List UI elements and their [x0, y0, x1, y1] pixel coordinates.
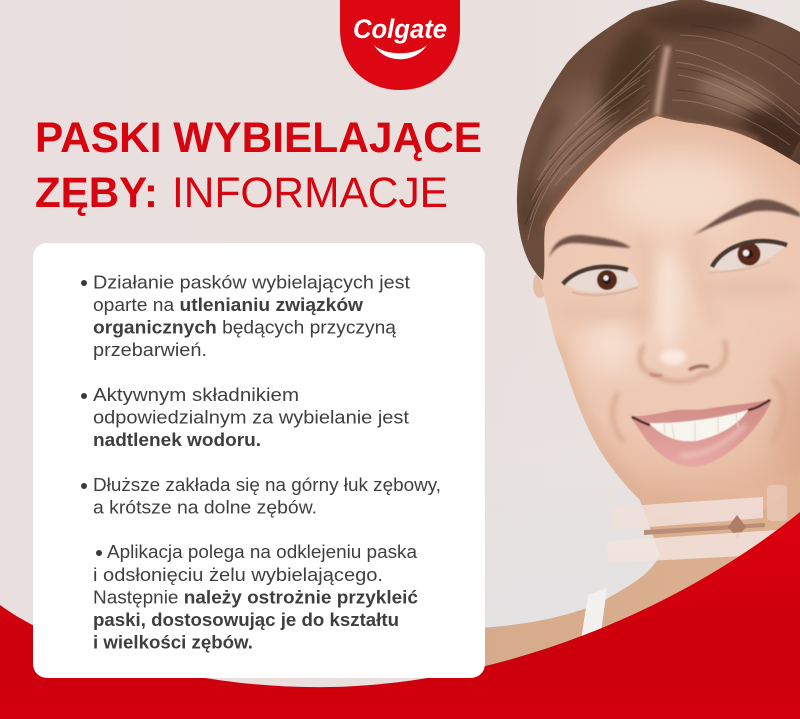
whitening strips [607, 485, 787, 563]
bullet 4: Następnie należy ostrożnie przykleić [93, 588, 418, 608]
title: INFORMACJE [172, 169, 448, 217]
bullet 1 [81, 272, 410, 360]
red wave [0, 512, 800, 719]
bullet 4: paski, dostosowując je do kształtu [93, 610, 399, 630]
photo: smiling woman with whitening strips [480, 0, 800, 700]
eyes [563, 241, 787, 295]
title: ZĘBY: [35, 169, 158, 217]
panel: information card [33, 243, 485, 678]
bullet 2: Aktywnym składnikiem [93, 385, 299, 405]
nose [640, 340, 726, 382]
title [35, 114, 482, 217]
bullet 1: przebarwień. [93, 340, 207, 360]
bullet 3 [81, 475, 441, 518]
face shading [555, 157, 800, 528]
bullet 4 [93, 542, 418, 652]
bullet 2: odpowiedzialnym za wybielanie jest [93, 408, 409, 428]
bullet 1: oparte na utlenianiu związków [93, 295, 364, 315]
mouth [630, 399, 772, 467]
bullet 3: a krótsze na dolne zębów. [93, 498, 317, 518]
bullet 3: Dłuższe zakłada się na górny łuk zębowy, [93, 475, 441, 495]
title: PASKI WYBIELAJĄCE [35, 114, 482, 162]
bullet 2: nadtlenek wodoru. [93, 430, 261, 450]
eyebrows [549, 199, 800, 258]
bullet 1: organicznych będących przyczyną [93, 318, 397, 338]
bullet 4: Aplikacja polega na odklejeniu paska [107, 542, 418, 562]
logo wordmark: Colgate [353, 14, 447, 44]
ear [533, 272, 547, 298]
logo shield [340, 0, 460, 90]
face [538, 100, 800, 524]
bullet 4: i odsłonięciu żelu wybielającego. [93, 565, 383, 585]
top strap [581, 588, 607, 640]
bullet 1: Działanie pasków wybielających jest [93, 272, 410, 292]
neck and shoulder [480, 470, 800, 700]
bullet 4: i wielkości zębów. [93, 632, 253, 652]
hair [508, 0, 800, 290]
bullet 2 [81, 385, 409, 450]
logo smile [374, 45, 427, 59]
